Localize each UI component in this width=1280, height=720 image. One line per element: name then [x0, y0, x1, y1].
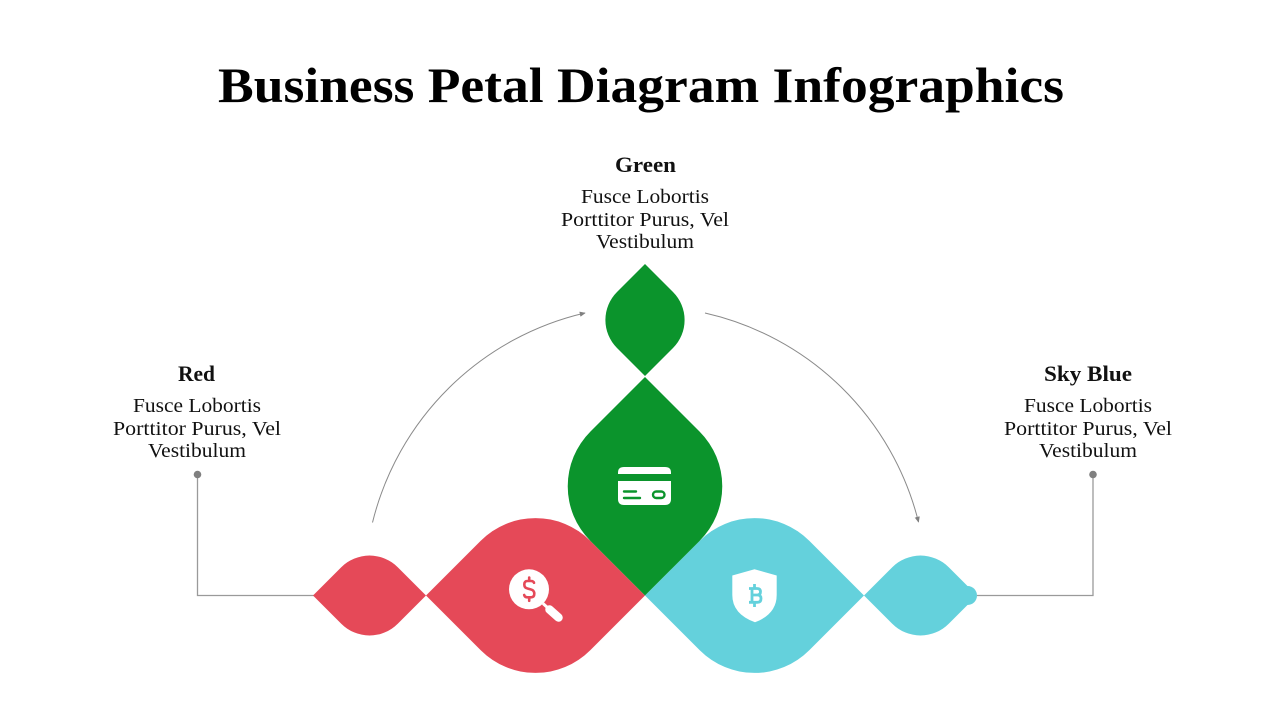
text block: red: Porttitor Purus, Vel [113, 418, 281, 440]
text block: green: Fusce Lobortis [581, 186, 709, 208]
title: Business Petal Diagram Infographics [218, 57, 1064, 113]
small petal: green [605, 264, 685, 376]
text block: red [113, 361, 281, 462]
big petal: green [568, 377, 722, 596]
text block: sky blue: Sky Blue [1044, 361, 1132, 386]
connector: red [194, 471, 314, 596]
big petal: red [426, 518, 645, 673]
text block: green: Porttitor Purus, Vel [561, 209, 729, 231]
big petal: sky blue [645, 518, 864, 673]
text block: sky blue [1004, 361, 1172, 462]
arrow: green to sky blue [705, 313, 918, 522]
text block: sky blue: Porttitor Purus, Vel [1004, 418, 1172, 440]
icon: bitcoin shield [732, 569, 777, 622]
icon: dollar magnifier [509, 569, 558, 618]
text block: green: Green [615, 152, 676, 177]
text block: sky blue: Fusce Lobortis [1024, 395, 1152, 417]
small petal: sky blue [864, 556, 977, 635]
arrow: red to green [372, 313, 585, 522]
text block: red: Fusce Lobortis [133, 395, 261, 417]
icon: credit card [618, 467, 671, 505]
text block: green [561, 152, 729, 253]
small petal: red [313, 556, 426, 635]
connector: sky blue [977, 471, 1097, 596]
text block: red: Red [178, 361, 215, 386]
text block: sky blue: Vestibulum [1039, 440, 1137, 462]
text block: green: Vestibulum [596, 231, 694, 253]
text block: red: Vestibulum [148, 440, 246, 462]
